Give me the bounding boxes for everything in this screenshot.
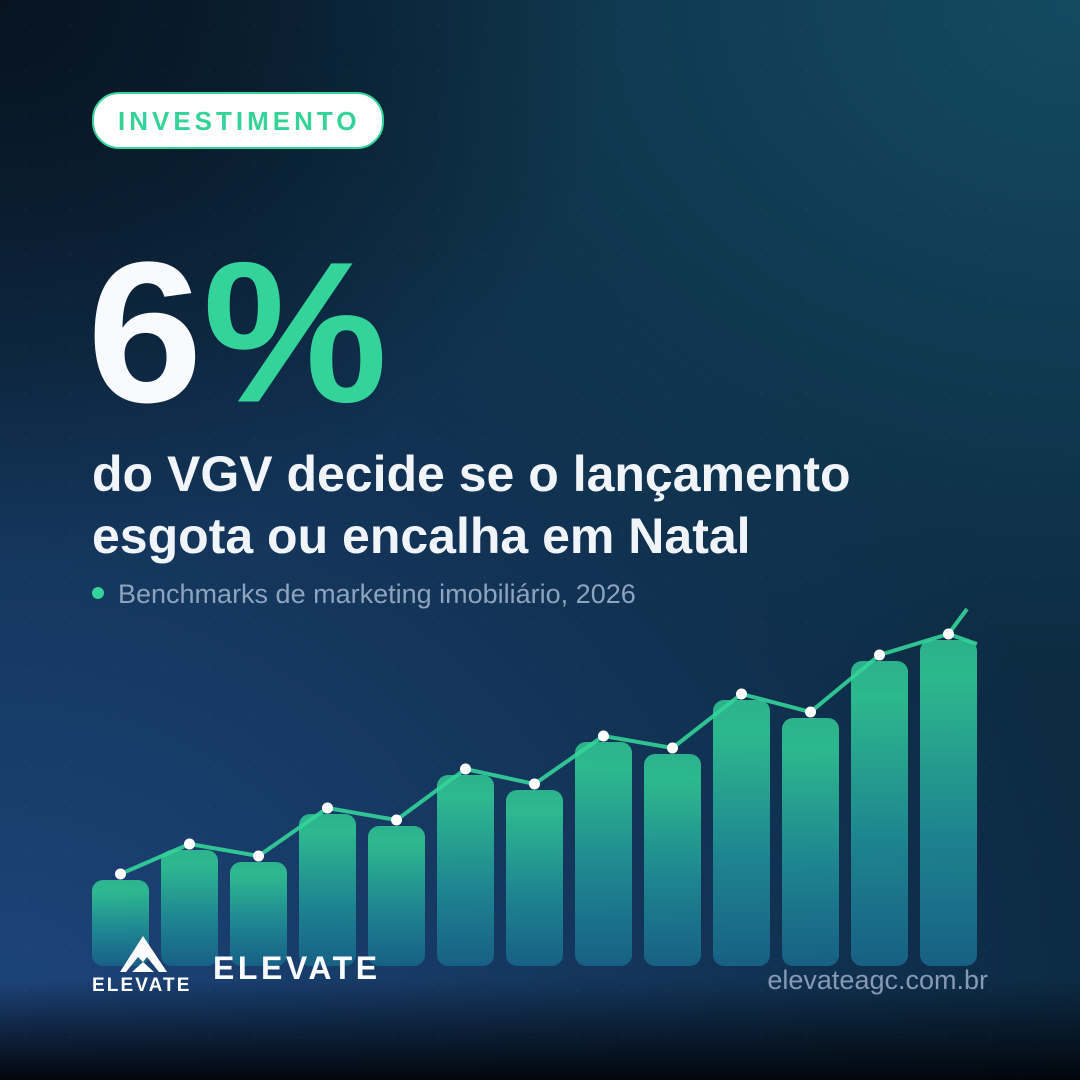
badge: investimento: INVESTIMENTO [118, 106, 361, 136]
source text: Benchmarks de marketing imobiliário, 2026 [118, 579, 636, 609]
brand name: ELEVATE [213, 950, 381, 986]
big number: 6%: 6% [87, 221, 388, 445]
headline: esgota ou encalha em Natal [92, 508, 751, 564]
source line [92, 579, 636, 609]
headline: do VGV decide se o lançamento [92, 446, 851, 502]
badge: investimento [92, 92, 384, 149]
logo mark [92, 936, 192, 996]
data points [115, 628, 954, 880]
logo small wordmark: ELEVATE [92, 975, 192, 996]
icon: mountain [120, 936, 167, 972]
website: elevateagc.com.br [767, 965, 988, 995]
headline [92, 446, 851, 564]
source bullet [92, 587, 104, 599]
bars [92, 640, 977, 966]
trend line [120, 609, 977, 874]
